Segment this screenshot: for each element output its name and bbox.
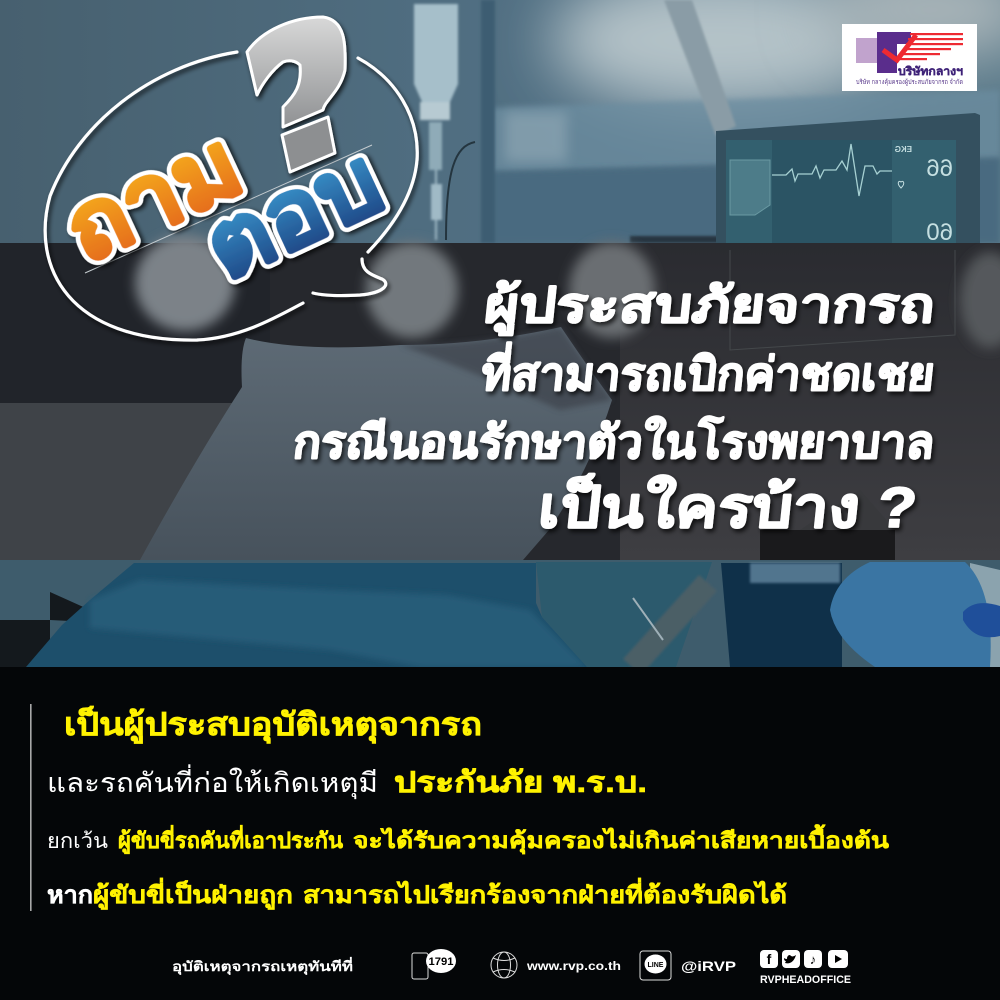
icon: hotline 1791: 1791	[428, 956, 454, 968]
social handle: RVPHEADOFFICE	[760, 974, 851, 986]
bed frame	[721, 563, 842, 667]
bed side rail	[632, 583, 708, 667]
bokeh lights	[135, 235, 1000, 348]
icon: question mark	[247, 17, 345, 172]
answer text block: ผู้ขับขี่รถคันที่เอาประกัน	[118, 824, 343, 855]
speech bubble badge: ถาม ตอบ	[45, 17, 417, 340]
divider line	[85, 145, 372, 273]
label: ถาม: ถาม	[50, 113, 256, 282]
website: www.rvp.co.th	[526, 959, 621, 973]
icon: LINE	[640, 951, 671, 980]
social icons: ♪	[810, 952, 816, 967]
dark box on table	[760, 530, 895, 560]
heart monitor: EKG	[895, 145, 912, 154]
bed arm rail	[664, 0, 736, 136]
social icons: f	[767, 951, 772, 967]
LINE handle: @iRVP	[681, 958, 736, 974]
blanket	[26, 563, 587, 667]
icon: IV drip bag	[414, 4, 458, 240]
dark translucent band	[0, 235, 1000, 560]
oxygen bottle	[830, 562, 1000, 667]
answer text block: หาก	[47, 882, 93, 909]
bright wall glow	[550, 0, 890, 110]
pillow	[140, 327, 612, 560]
band left wall	[0, 403, 260, 560]
speech bubble outline	[45, 52, 417, 340]
left chair silhouette	[0, 592, 90, 667]
headline question: ที่สามารถเบิกค่าชดเชย	[479, 341, 938, 400]
answer text block: ยกเว้น	[47, 830, 108, 853]
wall rail	[490, 90, 1000, 172]
answer text block: จะได้รับความคุ้มครองไม่เกินค่าเสียหายเบื้องต้น	[353, 824, 889, 855]
IV pole	[481, 0, 495, 243]
answer text block: สามารถไปเรียกร้องจากฝ่ายที่ต้องรับผิดได้	[303, 877, 787, 909]
footer lead text: อุบัติเหตุจากรถเหตุทันทีที่	[172, 956, 353, 975]
IV cord	[446, 142, 475, 240]
RVP logo	[842, 24, 977, 91]
answer text block: เป็นผู้ประสบอุบัติเหตุจากรถ	[64, 705, 482, 744]
band right fade	[620, 243, 1000, 560]
left accent rule	[30, 704, 32, 911]
monitor ghost lines	[730, 250, 955, 350]
heart monitor	[716, 113, 980, 246]
footer contact bar	[172, 949, 851, 986]
icon: globe	[491, 952, 517, 978]
icon: LINE: LINE	[648, 962, 664, 969]
lower photo: background	[0, 560, 1000, 667]
headline question	[291, 279, 938, 540]
answer text block: ประกันภัย พ.ร.บ.	[394, 767, 647, 799]
background photo: hospital room	[0, 0, 1000, 667]
label: ถาม: ถาม	[50, 113, 256, 282]
answer text block: และรถคันที่ก่อให้เกิดเหตุมี	[47, 764, 378, 800]
heart monitor: 66	[926, 155, 953, 182]
RVP logo: บริษัท กลางคุ้มครองผู้ประสบภัยจากรถ จำกัด	[856, 78, 963, 86]
label: ตอบ: ตอบ	[190, 130, 396, 299]
headline question: ผู้ประสบภัยจากรถ	[482, 279, 938, 336]
RVP logo: บริษัทกลางฯ	[898, 65, 963, 78]
black lower panel	[0, 667, 1000, 1000]
wall socket panel	[505, 112, 567, 162]
headline question: เป็นใครบ้าง ?	[535, 472, 920, 540]
label: ตอบ: ตอบ	[190, 130, 396, 299]
answer text block: ผู้ขับขี่เป็นฝ่ายถูก	[93, 877, 293, 910]
icon: hotline 1791	[412, 949, 456, 979]
social icons	[760, 950, 848, 968]
headline question: กรณีนอนรักษาตัวในโรงพยาบาล	[291, 415, 937, 468]
heart monitor: 60	[926, 219, 953, 246]
answer text block	[47, 705, 889, 910]
